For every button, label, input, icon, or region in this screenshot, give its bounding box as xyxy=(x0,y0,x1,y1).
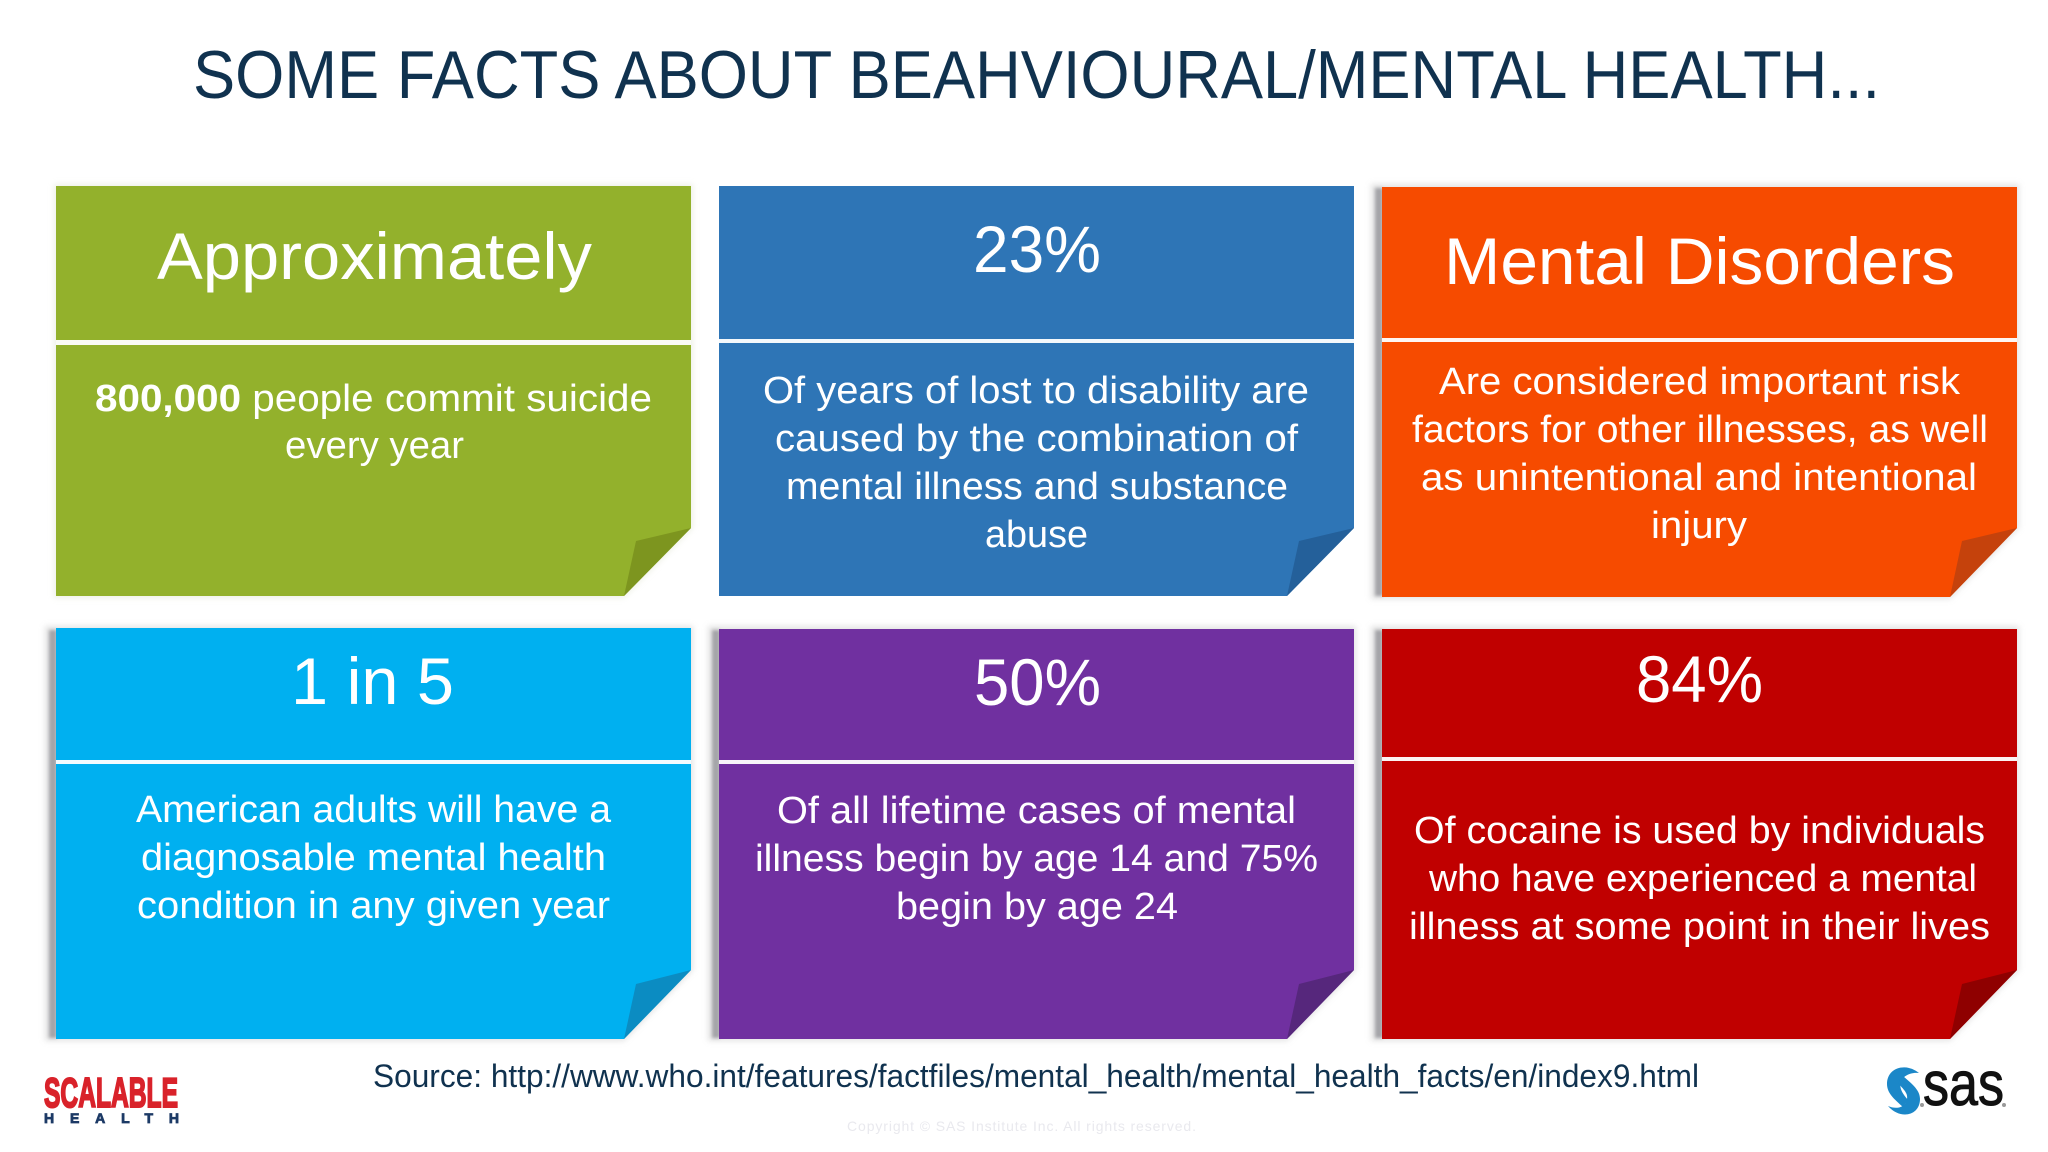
body text: Of all lifetime cases of mental xyxy=(777,790,1296,832)
panel: approximately 800,000 xyxy=(54,184,693,598)
panel: 50% xyxy=(708,626,1356,1041)
fold corner xyxy=(1950,970,2017,1039)
body text xyxy=(763,370,1309,556)
body text: injury xyxy=(1651,505,1747,547)
heading: 50%: 50% xyxy=(974,645,1101,719)
logo: sas: sas xyxy=(1923,1050,2004,1119)
fold corner xyxy=(1950,528,2017,597)
source line: Source: http://www.who.int/features/factfiles/mental_health/mental_health_facts/en/index9.html xyxy=(373,1058,1699,1094)
title: SOME FACTS ABOUT BEAHVIOURAL/MENTAL HEALTH... xyxy=(193,37,1880,113)
body text: abuse xyxy=(985,514,1088,556)
body text: factors for other illnesses, as well xyxy=(1412,409,1988,451)
body text: 800,000 people commit suicide xyxy=(95,378,652,420)
logo: sas xyxy=(1887,1050,2006,1119)
fold corner xyxy=(624,970,691,1039)
body text: who have experienced a mental xyxy=(1428,858,1977,900)
body text: mental illness and substance xyxy=(786,466,1288,508)
heading: Mental Disorders: Mental Disorders xyxy=(1444,224,1955,298)
body text: Of years of lost to disability are xyxy=(763,370,1309,412)
body text xyxy=(1412,361,1988,547)
panel: 23% xyxy=(719,186,1354,596)
panel: 84% xyxy=(1371,626,2019,1041)
body text xyxy=(136,789,612,927)
copyright: Copyright © SAS Institute Inc. All rights reserved. xyxy=(847,1118,1196,1134)
body text xyxy=(1409,810,1990,948)
fold corner xyxy=(1287,528,1354,596)
body text: American adults will have a xyxy=(136,789,612,831)
panel: mental disorders xyxy=(1371,184,2019,599)
logo: scalable health: SCALABLE xyxy=(44,1069,178,1116)
body text: caused by the combination of xyxy=(775,418,1298,460)
logo: scalable health xyxy=(44,1069,179,1126)
icon: sas swirl xyxy=(1887,1067,1920,1114)
body text: illness at some point in their lives xyxy=(1409,906,1990,948)
body text xyxy=(95,378,652,467)
body text xyxy=(755,790,1318,928)
body text: every year xyxy=(285,425,464,467)
heading: 84%: 84% xyxy=(1636,642,1763,716)
fold corner xyxy=(624,528,691,596)
body text: condition in any given year xyxy=(137,885,610,927)
body text: begin by age 24 xyxy=(896,886,1178,928)
body text: Are considered important risk xyxy=(1439,361,1961,403)
body text: diagnosable mental health xyxy=(141,837,606,879)
heading: Approximately: Approximately xyxy=(157,219,592,293)
body text: as unintentional and intentional xyxy=(1421,457,1977,499)
fold corner xyxy=(1287,970,1354,1039)
heading: 1 in 5: 1 in 5 xyxy=(291,644,454,718)
body text: illness begin by age 14 and 75% xyxy=(755,838,1318,880)
panel: 1 in 5 xyxy=(45,626,693,1041)
logo: scalable health: HEALTH xyxy=(44,1110,179,1126)
body text: Of cocaine is used by individuals xyxy=(1414,810,1985,852)
heading: 23%: 23% xyxy=(973,212,1101,286)
